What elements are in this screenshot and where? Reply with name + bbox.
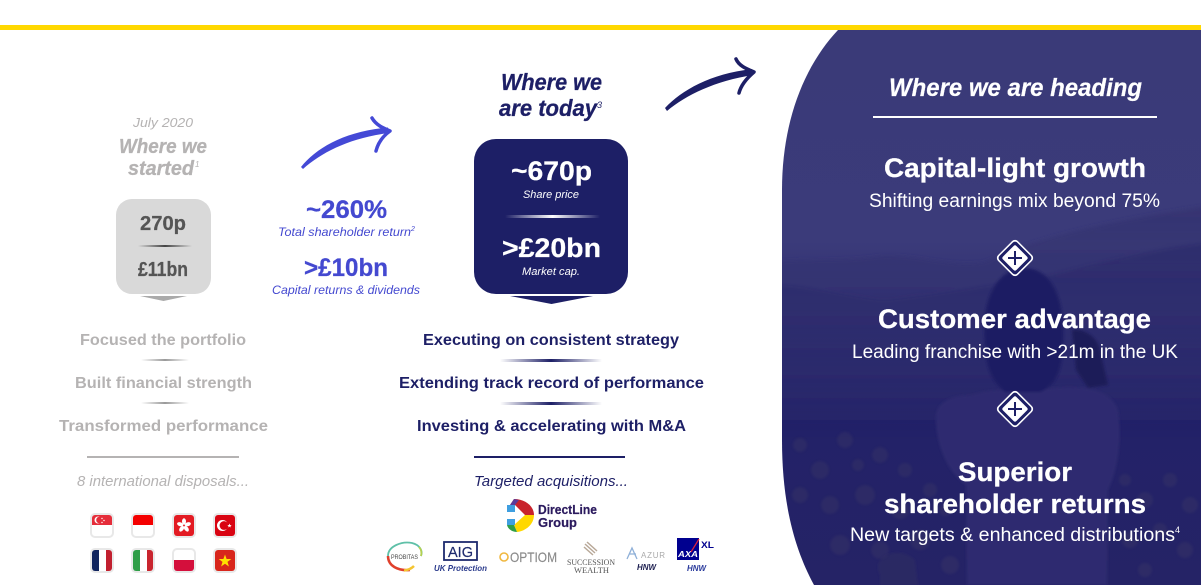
list: today actions: Extending track record of performance bbox=[399, 375, 704, 392]
column: where we started bbox=[59, 115, 268, 572]
logo: Optiom: OPTIOM bbox=[510, 549, 557, 565]
logo: AIG: UK Protection bbox=[434, 563, 487, 573]
customer advantage block bbox=[852, 304, 1178, 363]
stat: total shareholder return: 2 bbox=[410, 226, 415, 233]
logo: Succession Wealth: SUCCESSION bbox=[567, 558, 615, 567]
list: started achievements: Transformed performance bbox=[59, 418, 268, 435]
flag: France bbox=[91, 549, 113, 572]
logo: AIG: AIG bbox=[448, 544, 473, 561]
logo: Azur: HNW bbox=[637, 563, 657, 572]
metrics box: today bbox=[474, 139, 628, 304]
flag: Turkey bbox=[214, 514, 236, 537]
heading: where we are today: are today bbox=[499, 95, 598, 121]
customer advantage block: Leading franchise with >21m in the UK bbox=[852, 342, 1178, 363]
logo: Azur: AZUR bbox=[641, 551, 665, 560]
list: started achievements: Focused the portfolio bbox=[80, 332, 246, 349]
logo: Azur bbox=[627, 548, 665, 572]
flag: Singapore bbox=[91, 514, 113, 537]
heading: where we are today: 3 bbox=[597, 100, 602, 110]
flag: Italy bbox=[132, 549, 154, 572]
stat: capital returns: >£10bn bbox=[304, 254, 388, 282]
list: started achievements bbox=[59, 332, 268, 435]
logo: Direct Line Group bbox=[507, 499, 597, 532]
logo: Direct Line Group: DirectLine bbox=[538, 503, 597, 517]
logo: AXA XL: XL bbox=[701, 540, 715, 550]
top yellow bar bbox=[0, 25, 1201, 30]
logo: Succession Wealth: WEALTH bbox=[574, 566, 609, 575]
stat: capital returns bbox=[272, 254, 420, 297]
logo: AXA XL bbox=[677, 538, 715, 573]
capital-light growth block bbox=[869, 153, 1160, 212]
panel heading: Where we are heading bbox=[889, 74, 1142, 102]
panel: where we are heading bbox=[770, 30, 1201, 585]
logo: Direct Line Group: Group bbox=[538, 516, 577, 530]
arrow: blue progress bbox=[301, 118, 390, 169]
metrics box: today: Market cap. bbox=[522, 266, 580, 278]
flag: Hong Kong bbox=[173, 514, 195, 537]
metrics box: today: >£20bn bbox=[502, 233, 601, 263]
icon: plus diamond bbox=[995, 238, 1035, 278]
disposals caption: 8 international disposals... bbox=[77, 473, 249, 490]
heading: where we started: Where we bbox=[119, 136, 207, 158]
flag: Vietnam bbox=[214, 549, 236, 572]
list: today actions: Investing & accelerating with M&A bbox=[417, 418, 686, 435]
metrics box: today: ~670p bbox=[511, 156, 592, 186]
heading: where we are today bbox=[499, 69, 602, 121]
capital-light growth block: Capital-light growth bbox=[884, 153, 1146, 183]
list: today actions: Executing on consistent strategy bbox=[423, 332, 679, 349]
flags bbox=[91, 514, 236, 572]
superior shareholder returns block: shareholder returns bbox=[884, 489, 1146, 519]
arrow: navy progress bbox=[665, 59, 754, 111]
stat: total shareholder return: Total shareholder return bbox=[278, 225, 411, 239]
column: where we are today bbox=[388, 69, 715, 575]
metrics box: July 2020: 270p bbox=[140, 213, 186, 235]
logo: Probitas bbox=[388, 543, 422, 570]
superior shareholder returns block: 4 bbox=[1175, 525, 1180, 535]
stat: capital returns: Capital returns & dividends bbox=[272, 283, 420, 297]
icon: plus diamond bbox=[995, 389, 1035, 429]
flag: Indonesia bbox=[132, 514, 154, 537]
superior shareholder returns block bbox=[850, 457, 1180, 546]
logo: AIG bbox=[434, 542, 487, 573]
stat: total shareholder return bbox=[278, 196, 415, 239]
heading: where we started: 1 bbox=[195, 160, 199, 169]
person silhouette bbox=[936, 268, 1119, 584]
stat: total shareholder return: ~260% bbox=[306, 196, 387, 224]
logo: AXA XL: HNW bbox=[687, 564, 707, 573]
date label: July 2020 bbox=[132, 115, 194, 130]
panel background photo bbox=[770, 30, 1201, 585]
metrics box: July 2020: £11bn bbox=[138, 259, 188, 281]
heading: where we are today: Where we bbox=[501, 69, 602, 95]
list: today actions bbox=[399, 332, 704, 435]
logo: AXA XL: AXA bbox=[677, 550, 698, 559]
heading: where we started: started bbox=[128, 158, 195, 180]
logo: Probitas: PROBITAS bbox=[391, 554, 419, 561]
logo: Succession Wealth bbox=[567, 542, 615, 575]
customer advantage block: Customer advantage bbox=[878, 304, 1151, 334]
metrics box: today: Share price bbox=[523, 189, 579, 201]
column: shareholder return stats bbox=[272, 196, 420, 297]
acquisitions caption: Targeted acquisitions... bbox=[474, 473, 628, 490]
flag: Poland bbox=[173, 549, 195, 572]
heading: where we started bbox=[119, 136, 207, 180]
superior shareholder returns block: New targets & enhanced distributions bbox=[850, 525, 1175, 546]
metrics box: July 2020 bbox=[116, 199, 211, 301]
list: started achievements: Built financial strength bbox=[75, 375, 252, 392]
superior shareholder returns block: Superior bbox=[958, 457, 1072, 487]
capital-light growth block: Shifting earnings mix beyond 75% bbox=[869, 191, 1160, 212]
